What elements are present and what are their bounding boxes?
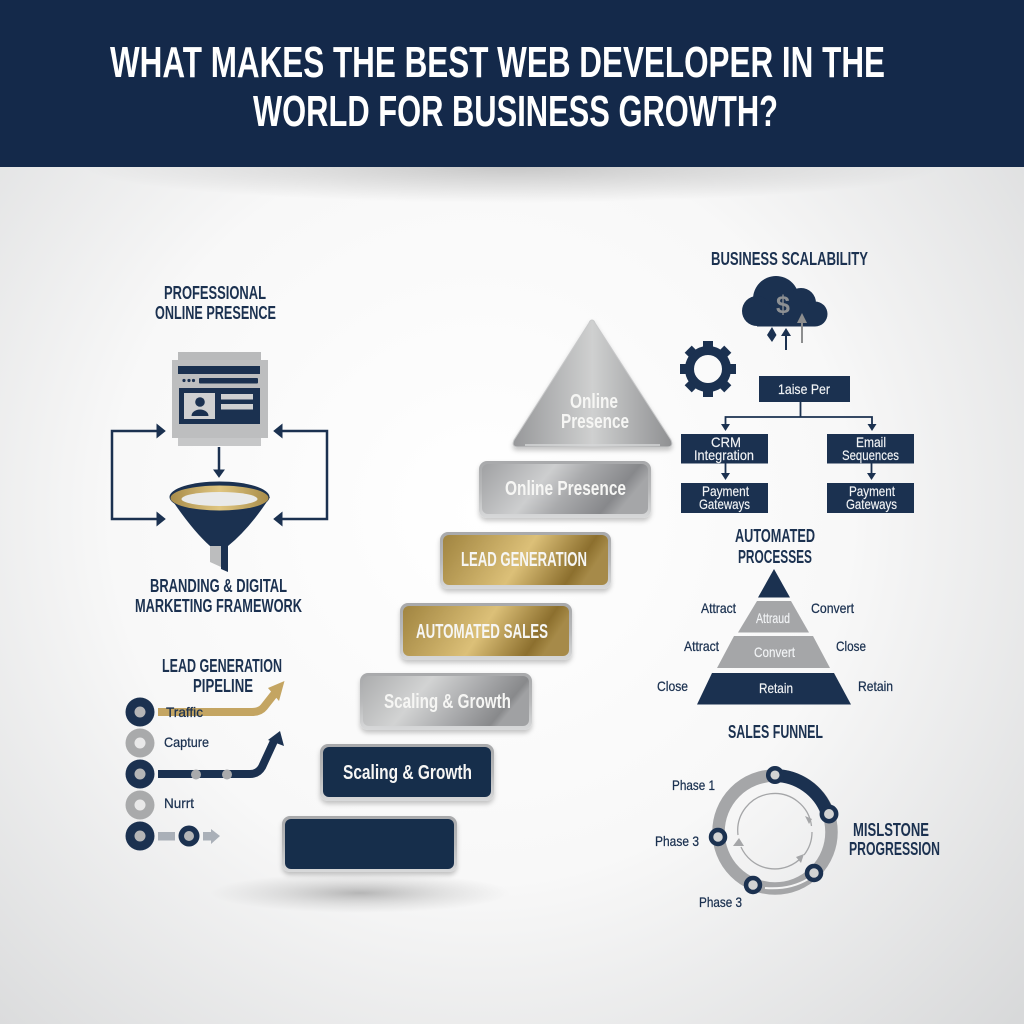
node 2 (126, 728, 154, 758)
panel: sales funnel pyramid (657, 526, 893, 742)
title (110, 38, 885, 136)
org chart top box (759, 376, 850, 402)
milestone nodes (711, 768, 836, 892)
arrow: right loop (274, 424, 327, 526)
step: online presence: Online Presence (505, 478, 626, 500)
node 4 (126, 790, 154, 820)
arrow: browser to funnel (214, 447, 224, 477)
step: lead generation (440, 532, 611, 589)
step: scaling and growth navy: Scaling & Growth (343, 762, 472, 784)
box: payment gateways left: Gateways (699, 496, 750, 512)
pyramid tier 4 (697, 673, 851, 704)
panel: professional online presence (112, 283, 327, 616)
pyramid top: Online (570, 391, 618, 413)
heading: milestone progression (849, 820, 940, 859)
header shadow (82, 131, 942, 203)
panel: business scalability (680, 249, 914, 513)
heading: lead generation pipeline: LEAD GENERATION (162, 656, 282, 676)
label: phase 3 left: Phase 3 (655, 833, 699, 849)
label: capture: Capture (164, 734, 209, 750)
arrow: gold traffic path (158, 681, 284, 712)
heading: automated processes: PROCESSES (738, 547, 812, 567)
floor shadow (210, 873, 510, 913)
box: email sequences: Email (856, 434, 886, 450)
box: payment gateways right: Payment (849, 483, 895, 499)
arrow: left loop (112, 424, 165, 526)
box: payment gateways left (681, 483, 768, 513)
step: blank base (282, 816, 457, 872)
box: email sequences (827, 434, 914, 464)
side labels: Close (657, 678, 688, 694)
heading: milestone progression: MISLSTONE (853, 820, 929, 840)
heading: branding and digital marketing framework: BRANDING & DIGITAL (150, 576, 287, 596)
icon: gear (680, 341, 736, 397)
org chart top box: 1aise Per (778, 381, 830, 397)
label: phase 3 bottom: Phase 3 (699, 894, 742, 910)
step: automated sales (400, 603, 572, 660)
pyramid tier 3: Convert (754, 644, 795, 660)
node 1 (126, 698, 154, 726)
org chart connectors (721, 402, 876, 480)
label: traffic: Traffic (166, 704, 203, 720)
pyramid tier 4: Retain (759, 680, 793, 696)
icon: cloud with dollar (742, 276, 828, 350)
side labels (657, 600, 893, 694)
side labels: Attract (684, 638, 719, 654)
box: crm integration (681, 434, 768, 464)
label: nurture: Nurrt (164, 795, 194, 811)
pyramid top: Presence (561, 411, 629, 433)
progress ring (718, 776, 832, 888)
arrow: bottom short path (158, 826, 220, 846)
side labels: Retain (858, 678, 893, 694)
inner cycle arrows (733, 793, 812, 869)
node 3 (126, 760, 154, 788)
step: automated sales: AUTOMATED SALES (416, 621, 548, 643)
side labels: Convert (811, 600, 854, 616)
pyramid tier 1 (758, 569, 790, 598)
box: email sequences: Sequences (842, 447, 899, 463)
label: phase 1: Phase 1 (672, 777, 715, 793)
panel: lead generation pipeline (126, 656, 284, 850)
heading: automated processes: AUTOMATED (735, 526, 815, 546)
arrow: navy capture path (158, 731, 284, 780)
icon: funnel (170, 482, 270, 572)
heading: sales funnel: SALES FUNNEL (728, 722, 823, 742)
step: scaling and growth silver (360, 673, 532, 730)
box: payment gateways left: Payment (702, 483, 749, 499)
step: online presence (479, 461, 651, 518)
box: payment gateways right (827, 483, 914, 513)
heading: professional online presence (155, 283, 276, 323)
heading: milestone progression: PROGRESSION (849, 839, 940, 859)
heading: branding and digital marketing framework (135, 576, 302, 616)
icon: browser window (172, 352, 268, 446)
panel: milestone progression (655, 768, 940, 910)
heading: professional online presence: PROFESSIONAL (164, 283, 266, 303)
header banner (0, 0, 1024, 167)
pyramid tier 2: Attraud (756, 610, 790, 626)
step: lead generation: LEAD GENERATION (461, 549, 587, 571)
panel: central staircase (210, 320, 672, 913)
heading: lead generation pipeline: PIPELINE (193, 676, 253, 696)
pyramid tier 3 (717, 636, 830, 668)
box: payment gateways right: Gateways (846, 496, 897, 512)
heading: business scalability: BUSINESS SCALABILITY (711, 249, 868, 269)
heading: professional online presence: ONLINE PRESENCE (155, 303, 276, 323)
box: crm integration: Integration (694, 447, 754, 463)
step: scaling and growth silver: Scaling & Growth (384, 691, 511, 713)
side labels: Close (836, 638, 866, 654)
icon: cloud with dollar: $ (776, 291, 790, 319)
box: crm integration: CRM (711, 434, 741, 450)
heading: lead generation pipeline (162, 656, 282, 696)
heading: automated processes (735, 526, 815, 567)
pyramid top (513, 320, 672, 447)
heading: branding and digital marketing framework: MARKETING FRAMEWORK (135, 596, 302, 616)
pyramid tier 2 (738, 601, 809, 632)
step: scaling and growth navy (320, 744, 494, 801)
node 5 (126, 822, 154, 850)
title: WORLD FOR BUSINESS GROWTH? (253, 87, 778, 136)
side labels: Attract (701, 600, 736, 616)
